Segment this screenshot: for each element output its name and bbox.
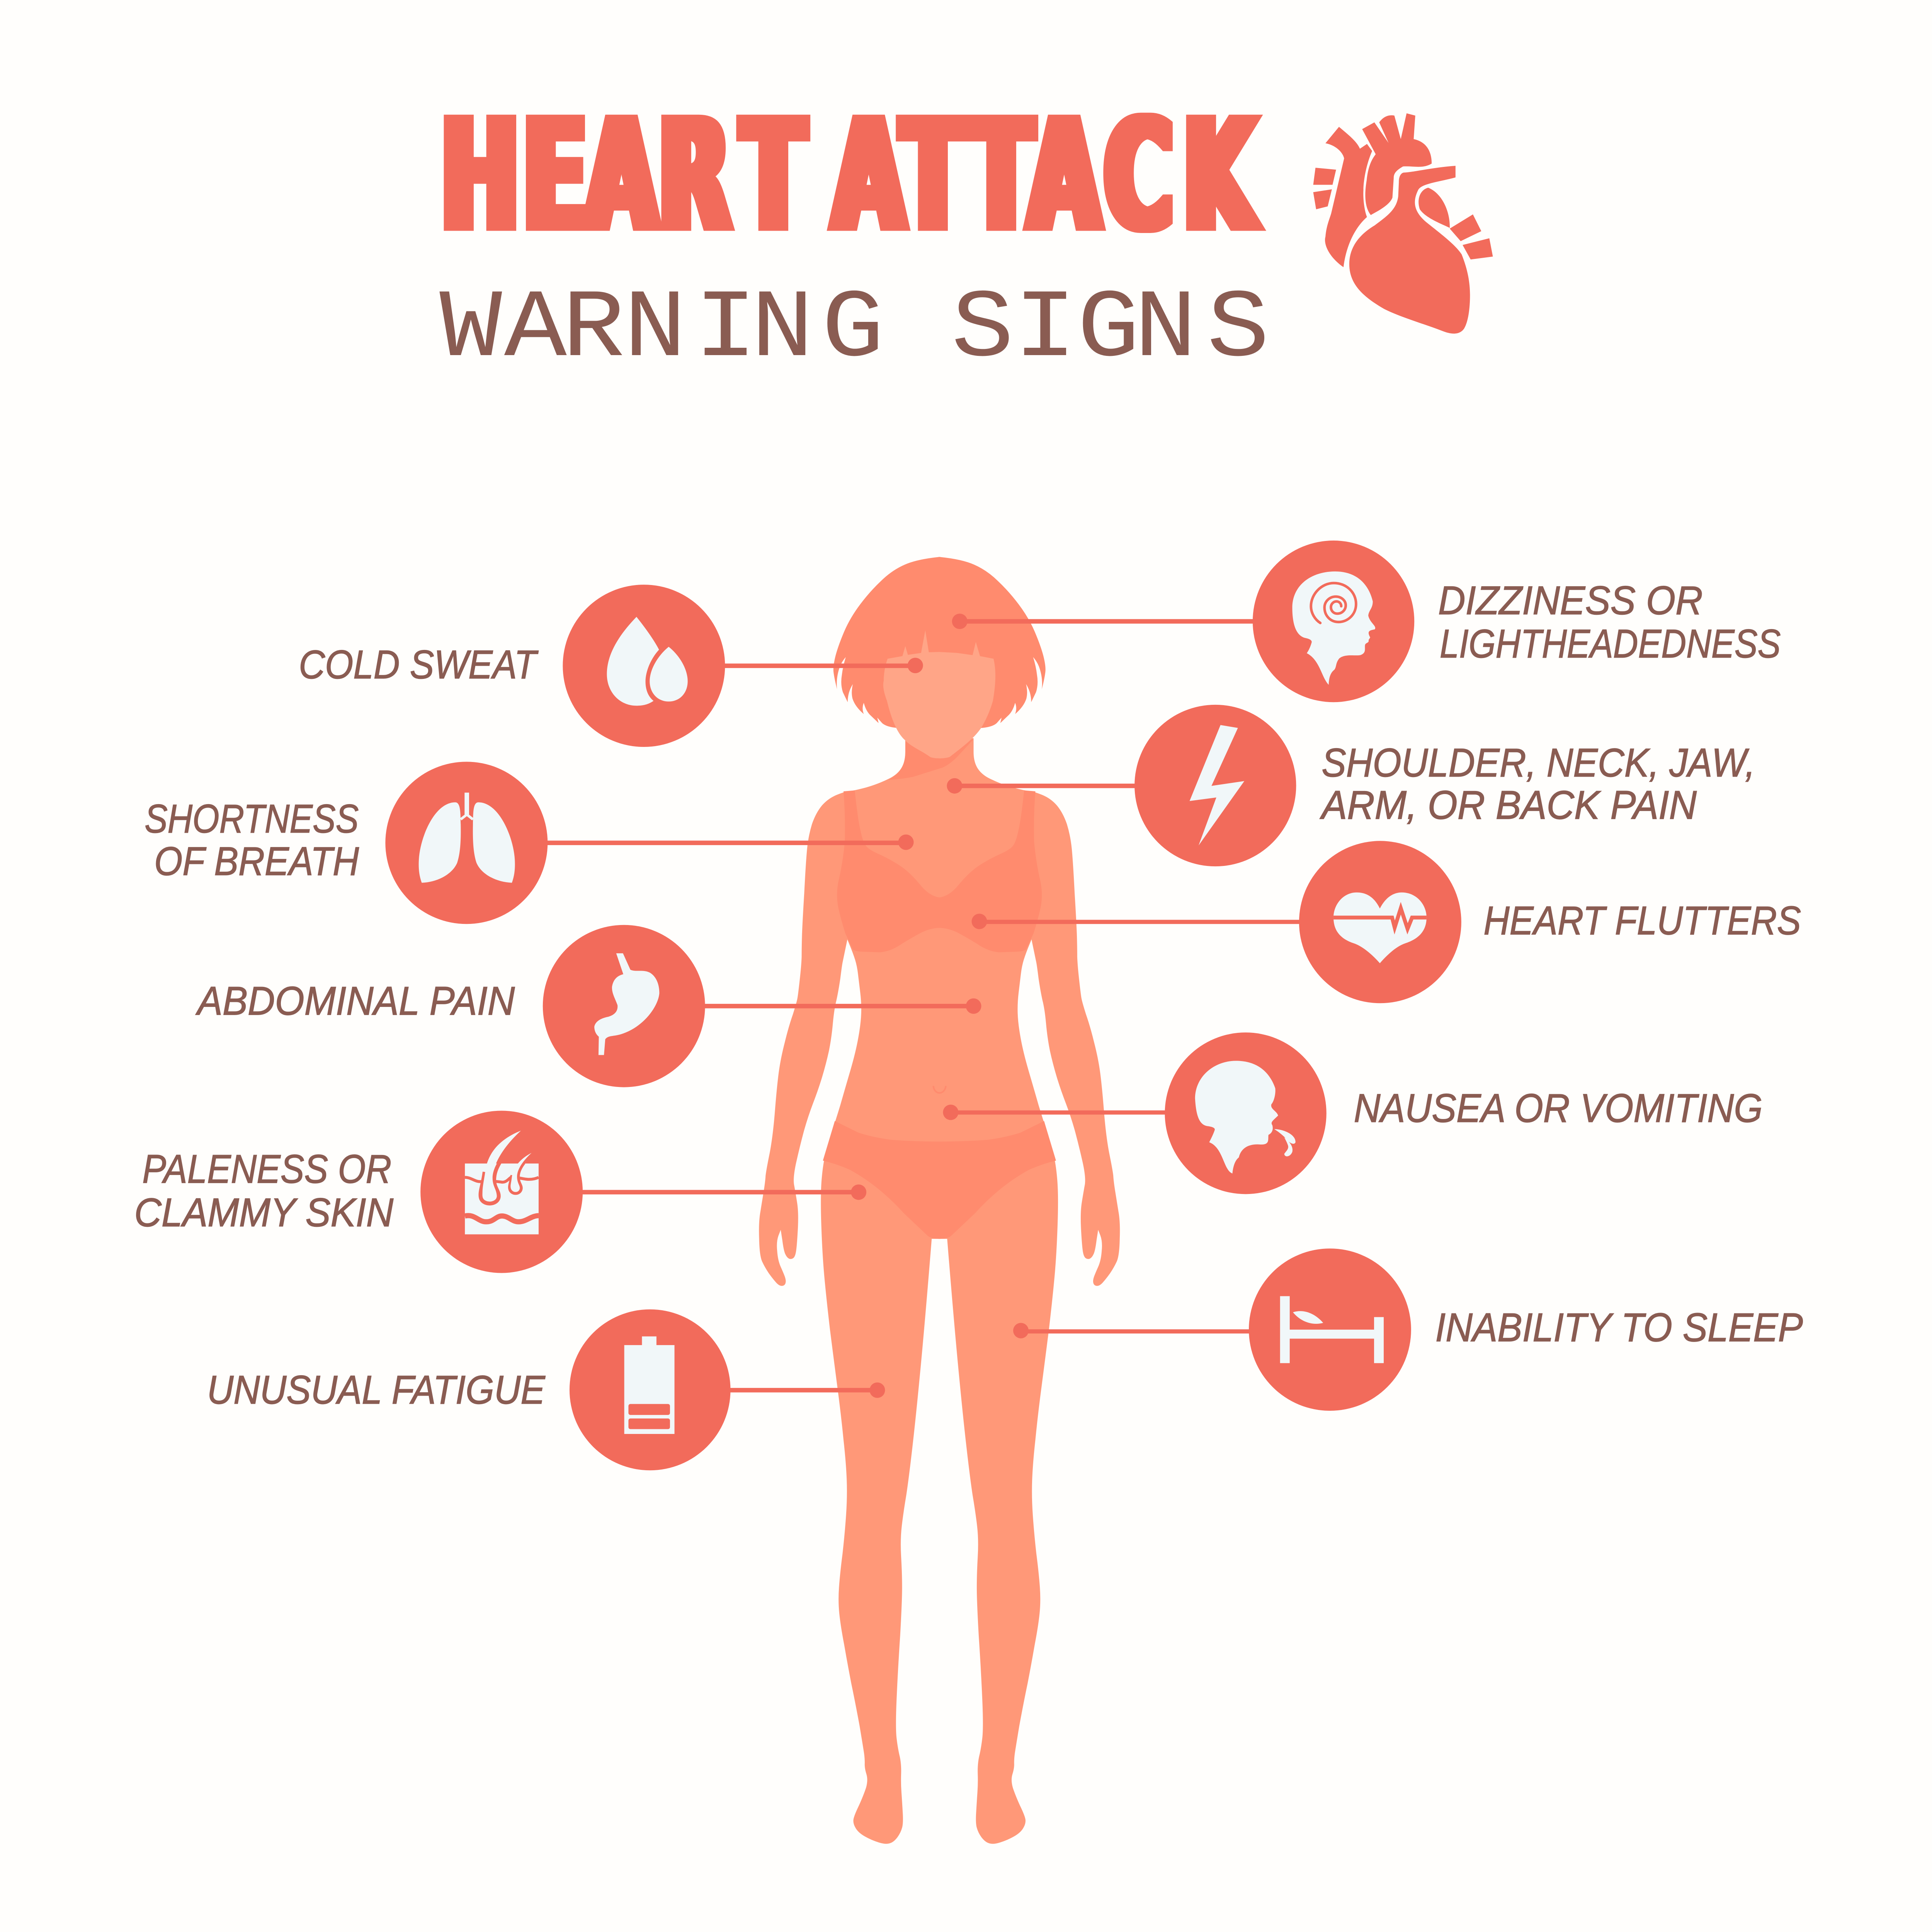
label: ARM, OR BACK PAIN: [1320, 783, 1697, 828]
connector line: [952, 614, 1333, 629]
symptom: cold sweat: [299, 585, 923, 747]
symptom: nausea or vomiting: [943, 1032, 1763, 1194]
label: UNUSUAL FATIGUE: [207, 1368, 546, 1413]
icon circle: skin layers: [420, 1111, 583, 1273]
symptom: shoulder, neck, jaw, arm or back pain: [947, 705, 1755, 866]
bra: [837, 790, 1042, 952]
symptom: inability to sleep: [1013, 1248, 1803, 1411]
label: HEART FLUTTERS: [1483, 898, 1801, 943]
body skin: [759, 737, 1120, 1844]
label: PALENESS OR: [142, 1147, 391, 1192]
symptom: dizziness or lightheadedness: [952, 541, 1781, 702]
connector line: [644, 658, 923, 673]
label: LIGHTHEADEDNESS: [1440, 621, 1781, 666]
underwear: [823, 1121, 1056, 1239]
icon circle: low battery: [570, 1310, 731, 1470]
label: NAUSEA OR VOMITING: [1354, 1086, 1763, 1131]
label: COLD SWEAT: [299, 643, 539, 687]
label: CLAMMY SKIN: [134, 1190, 394, 1235]
symptom: heart flutters: [972, 841, 1801, 1003]
connector line: [466, 835, 914, 850]
connector line: [1013, 1323, 1330, 1338]
label: SHORTNESS: [145, 797, 359, 842]
icon circle: head with spiral: [1253, 541, 1414, 702]
figure: woman body silhouette: [759, 557, 1120, 1844]
hair: [833, 557, 1046, 728]
icon circle: heart with pulse: [1299, 841, 1461, 1003]
icon circle: head vomiting: [1165, 1032, 1327, 1194]
neck shadow: [888, 738, 973, 780]
icon circle: lungs: [385, 762, 548, 924]
icon circle: lightning bolt: [1134, 705, 1296, 866]
symptom: unusual fatigue: [207, 1310, 885, 1470]
label: OF BREATH: [154, 839, 359, 884]
icon: anatomical heart: [1313, 113, 1493, 333]
symptom: abdominal pain: [195, 925, 981, 1087]
subheading: warning signs: WARNING SIGNS: [439, 275, 1269, 384]
symptom: paleness or clammy skin: [134, 1111, 866, 1273]
label: [1320, 741, 1755, 828]
connector line: [624, 998, 981, 1014]
label: [134, 1147, 394, 1235]
label: INABILITY TO SLEEP: [1435, 1305, 1803, 1350]
label: [145, 797, 359, 884]
face: [883, 630, 995, 759]
connector line: [943, 1105, 1246, 1120]
connector line: [947, 778, 1215, 794]
symptom: shortness of breath: [145, 762, 914, 924]
label: ABDOMINAL PAIN: [195, 979, 515, 1024]
icon circle: sweat drops: [563, 585, 725, 747]
navel: [933, 1086, 946, 1093]
title: heart attack warning signs: [439, 87, 1269, 384]
label: [1438, 578, 1781, 666]
connector line: [650, 1383, 885, 1398]
icon circle: bed: [1249, 1248, 1411, 1411]
icon circle: stomach: [543, 925, 705, 1087]
label: DIZZINESS OR: [1438, 578, 1703, 623]
label: SHOULDER, NECK, JAW,: [1321, 741, 1755, 786]
connector line: [972, 914, 1380, 929]
heading: heart attack: HEART ATTACK: [442, 87, 1259, 264]
connector line: [502, 1184, 866, 1200]
